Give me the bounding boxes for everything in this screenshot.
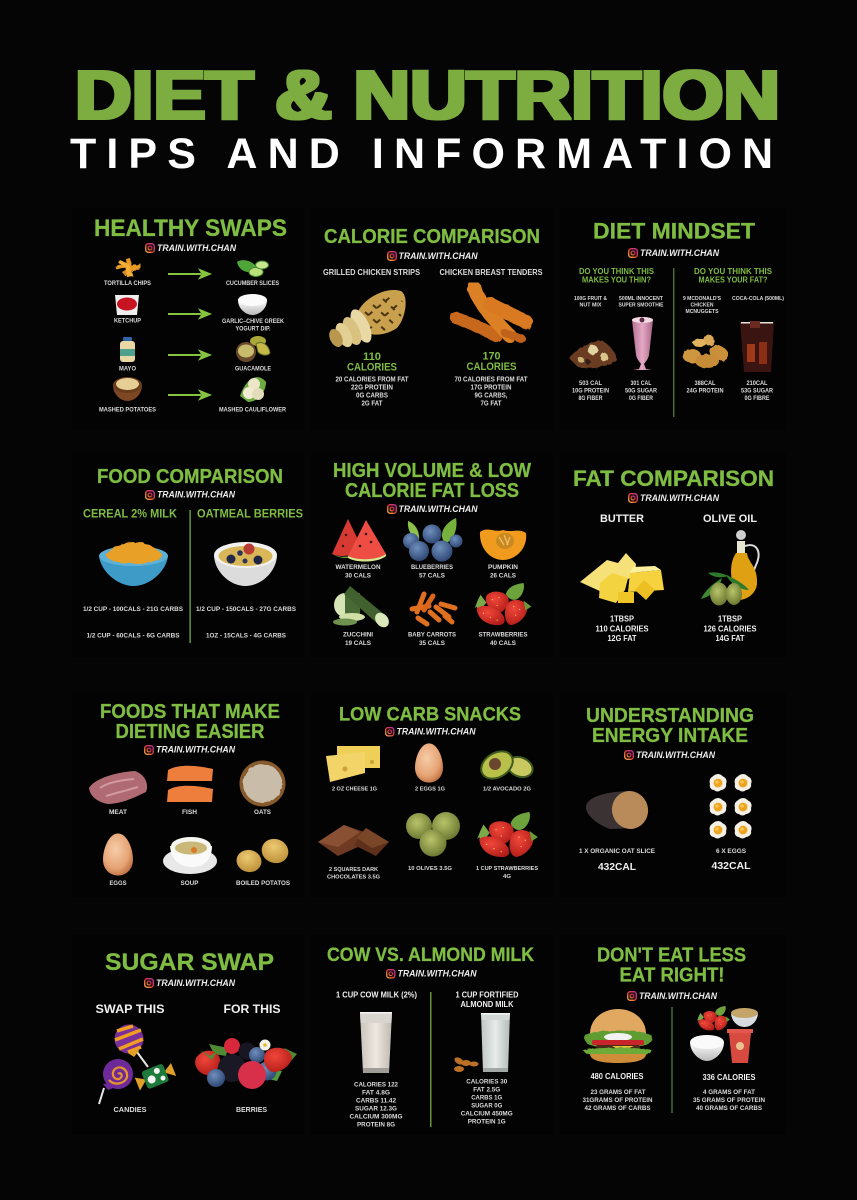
- panel: dont eat less eat right: [560, 935, 786, 1135]
- label: garlic chive greek yogurt dip: [222, 318, 284, 332]
- heading: high volume low calorie fat loss: [333, 460, 531, 502]
- stats: cereal and oatmeal: 1/2 CUP - 60CALS - 6G CARBS: [86, 633, 180, 640]
- stats: cola: 0G FIBRE: [744, 395, 770, 402]
- stats: burger: 31GRAMS OF PROTEIN: [582, 1097, 653, 1104]
- heading: food comparison: FOOD COMPARISON: [97, 466, 283, 488]
- labels: row two foods: 35 CALS: [419, 640, 446, 647]
- question: fat: DO YOU THINK THIS: [694, 267, 772, 276]
- icon: boiled potatoes: [234, 835, 292, 874]
- labels: row two foods: BABY CARROTS: [408, 632, 457, 639]
- stats: chicken tenders: 17G PROTEIN: [470, 385, 512, 392]
- stats: cereal and oatmeal: 1/2 CUP - 100CALS - 21G CARBS: [83, 606, 184, 613]
- stats: olive oil: [704, 615, 756, 643]
- stats: cow milk: CALORIES 122: [354, 1082, 398, 1089]
- stats: grilled chicken: 2G FAT: [362, 401, 383, 408]
- labels: chocolate olives strawberries: [327, 866, 538, 881]
- value: eggs calories: 432CAL: [712, 861, 750, 872]
- panel: foods that make dieting easier: [72, 692, 304, 897]
- icon: red juice cup: [727, 1029, 753, 1063]
- label: cereal: CEREAL 2% MILK: [83, 508, 178, 520]
- food labels: [574, 296, 784, 315]
- label: cow milk: 1 CUP COW MILK (2%): [336, 991, 417, 1000]
- food labels: SUPER SMOOTHIE: [618, 302, 664, 308]
- arrow: [168, 268, 212, 280]
- icon: olives: [406, 812, 460, 856]
- icon: ketchup: [115, 295, 139, 315]
- stats: smoothie: 50G SUGAR: [625, 388, 657, 395]
- question: thin: MAKES YOU THIN?: [582, 275, 651, 284]
- panel: healthy swaps: [72, 208, 304, 430]
- label: 336 calories: 336 CALORIES: [702, 1073, 756, 1082]
- stats: chicken tenders: 70 CALORIES FROM FAT: [454, 376, 528, 384]
- stats: cereal and oatmeal: 1OZ - 15CALS - 4G CARBS: [206, 633, 287, 640]
- label: 480 calories: 480 CALORIES: [590, 1072, 644, 1081]
- icon: fish: [167, 766, 213, 802]
- stats: burger: [582, 1089, 653, 1112]
- stats: chicken tenders: [454, 376, 528, 408]
- stats: cola: 53G SUGAR: [741, 388, 773, 395]
- stats: cow milk: FAT 4.8G: [362, 1090, 390, 1097]
- icon: oats: [240, 760, 286, 806]
- label: butter: BUTTER: [600, 513, 644, 525]
- labels: meat fish oats: [109, 809, 272, 816]
- stats: grilled chicken: [336, 376, 409, 408]
- labels: chocolate olives strawberries: 10 OLIVES 3.5G: [408, 866, 452, 872]
- heading: healthy swaps: HEALTHY SWAPS: [94, 215, 287, 242]
- labels: row two foods: [343, 632, 528, 647]
- heading: understanding energy intake: [586, 705, 754, 747]
- calories: 110: [347, 351, 397, 374]
- label: ketchup: KETCHUP: [114, 318, 142, 324]
- instagram handle: TRAIN.WITH.CHAN: [639, 990, 717, 1001]
- icon: avocado: [476, 746, 536, 784]
- icon: watermelon: [332, 519, 386, 562]
- icon: chicken nuggets: [683, 332, 731, 368]
- heading: foods that make dieting easier: FOODS THAT MAKE: [100, 701, 280, 723]
- icon: dark chocolate: [318, 825, 389, 856]
- icon: fruit and nut mix: [569, 340, 617, 368]
- heading: foods that make dieting easier: DIETING EASIER: [116, 721, 265, 743]
- heading: understanding energy intake: ENERGY INTAKE: [592, 725, 748, 747]
- icon: egg: [415, 743, 443, 783]
- arrow: [168, 389, 212, 401]
- stats: healthy meal: 35 GRAMS OF PROTEIN: [693, 1097, 765, 1104]
- label: oatmeal: OATMEAL BERRIES: [197, 508, 303, 520]
- labels: eggs soup potatoes: SOUP: [180, 880, 199, 887]
- value: oat slice calories: 432CAL: [598, 862, 636, 873]
- stats: butter: [596, 615, 648, 643]
- icon: oatmeal bowl: [214, 542, 277, 586]
- label: swap this: SWAP THIS: [96, 1004, 165, 1016]
- question: thin: DO YOU THINK THIS: [579, 267, 654, 276]
- icon: greek yogurt dip: [238, 294, 267, 315]
- labels: row one foods: WATERMELON: [336, 564, 381, 571]
- stats: healthy meal: [693, 1089, 765, 1112]
- food labels: NUT MIX: [580, 302, 602, 308]
- title: DIET & NUTRITION: [75, 56, 780, 134]
- heading: foods that make dieting easier: [100, 701, 280, 743]
- labels: chocolate olives strawberries: 1 CUP STRAWBERRIES: [476, 866, 538, 872]
- stats: fruit nut mix: 8G FIBER: [578, 395, 603, 402]
- label: olive oil: OLIVE OIL: [703, 513, 758, 525]
- panel: high volume low calorie: [311, 452, 553, 657]
- icon: six eggs: [710, 774, 752, 838]
- labels: cheese egg avocado: 1/2 AVOCADO 2G: [483, 787, 531, 793]
- stats: nuggets: 24G PROTEIN: [686, 388, 724, 395]
- icon: guacamole: [236, 336, 270, 362]
- label: garlic chive greek yogurt dip: YOGURT DIP.: [236, 326, 271, 332]
- labels: row one foods: 57 CALS: [419, 572, 446, 580]
- labels: chocolate olives strawberries: 4G: [503, 874, 511, 880]
- label: mashed cauliflower: MASHED CAULIFLOWER: [219, 406, 286, 414]
- icon: pumpkin: [480, 529, 526, 560]
- icon: cereal bowl: [99, 542, 168, 586]
- label: tortilla chips: TORTILLA CHIPS: [104, 280, 152, 287]
- labels: meat fish oats: MEAT: [109, 809, 127, 816]
- icon: cow milk glass: [360, 1012, 392, 1073]
- panel: low carb snacks: [311, 692, 553, 897]
- stats: cola: [741, 380, 773, 402]
- instagram handle: TRAIN.WITH.CHAN: [157, 242, 236, 253]
- calories: 170: 170: [482, 350, 501, 362]
- icon: strawberries: [475, 583, 531, 625]
- icon: strawberries: [477, 812, 538, 857]
- instagram handle: TRAIN.WITH.CHAN: [640, 247, 719, 258]
- title: [70, 56, 783, 178]
- stats: chicken tenders: 7G FAT: [480, 401, 502, 408]
- icon: grilled chicken: [327, 290, 406, 350]
- heading: sugar swap: SUGAR SWAP: [105, 949, 274, 976]
- stats: fruit nut mix: [572, 380, 609, 402]
- label: candies: CANDIES: [114, 1107, 147, 1114]
- icon: burger: [583, 1009, 652, 1063]
- icon: cauliflower: [240, 377, 266, 402]
- icon: berries: [195, 1038, 297, 1089]
- icon: zucchini: [333, 586, 392, 630]
- icon: blueberries: [403, 518, 462, 562]
- labels: row one foods: 30 CALS: [345, 572, 372, 580]
- label: almond milk: ALMOND MILK: [460, 1000, 514, 1009]
- stats: cereal and oatmeal: [83, 606, 297, 640]
- heading: dont eat less eat right: DON'T EAT LESS: [597, 945, 746, 967]
- stats: grilled chicken: 0G CARBS: [356, 393, 388, 400]
- icon: yogurt bowl: [690, 1035, 724, 1061]
- arrow: [168, 308, 212, 320]
- icon: chicken tenders: [456, 288, 526, 339]
- stats: nuggets: 388CAL: [694, 380, 716, 387]
- icon: cheese: [326, 746, 380, 782]
- labels: cheese egg avocado: 2 OZ CHEESE 1G: [332, 787, 377, 793]
- heading: dont eat less eat right: EAT RIGHT!: [620, 965, 724, 987]
- heading: fat comparison: FAT COMPARISON: [573, 466, 774, 491]
- title: TIPS AND INFORMATION: [70, 130, 783, 178]
- label: garlic chive greek yogurt dip: GARLIC–CHIVE GREEK: [222, 318, 284, 325]
- labels: eggs soup potatoes: BOILED POTATOS: [236, 880, 291, 887]
- icon: almond milk glass: [481, 1013, 510, 1072]
- labels: row two foods: ZUCCHINI: [343, 632, 373, 639]
- heading: calorie comparison: CALORIE COMPARISON: [324, 226, 540, 248]
- stats: smoothie: 301 CAL: [630, 380, 652, 387]
- labels: cheese egg avocado: 2 EGGS 1G: [415, 787, 445, 793]
- icon: cereal bowl: [731, 1008, 758, 1027]
- icon: mayo: [120, 337, 135, 362]
- labels: eggs soup potatoes: [110, 880, 291, 887]
- stats: almond milk: FAT 2.5G: [473, 1086, 500, 1093]
- stats: smoothie: 0G FIBER: [629, 395, 653, 402]
- label: almond milk: [456, 991, 519, 1009]
- stats: smoothie: [625, 380, 657, 402]
- stats: burger: 23 GRAMS OF FAT: [590, 1089, 646, 1096]
- icon: baby carrots: [412, 594, 455, 624]
- labels: eggs soup potatoes: EGGS: [110, 880, 127, 887]
- icon: smoothie: [632, 317, 653, 370]
- labels: cheese egg avocado: [332, 787, 531, 793]
- stats: cola: 210CAL: [746, 380, 768, 387]
- stats: butter: 12G FAT: [608, 634, 637, 643]
- label: mashed potatoes: MASHED POTATOES: [99, 406, 157, 414]
- heading: high volume low calorie fat loss: HIGH VOLUME & LOW: [333, 460, 531, 482]
- stats: grilled chicken: 22G PROTEIN: [351, 385, 393, 392]
- label: cucumber slices: CUCUMBER SLICES: [226, 280, 280, 287]
- panel: calorie comparison: [311, 208, 553, 430]
- icon: egg: [103, 834, 133, 876]
- icon: strawberries: [697, 1006, 730, 1030]
- labels: row two foods: 40 CALS: [490, 640, 517, 647]
- stats: cow milk: [350, 1082, 403, 1129]
- stats: cereal and oatmeal: 1/2 CUP - 150CALS - 27G CARBS: [196, 606, 297, 613]
- stats: almond milk: [461, 1078, 513, 1125]
- stats: cow milk: CALCIUM 300MG: [350, 1114, 403, 1121]
- food labels: COCA-COLA (500ML): [732, 296, 784, 302]
- stats: olive oil: 126 CALORIES: [704, 624, 756, 634]
- instagram handle: TRAIN.WITH.CHAN: [156, 977, 235, 988]
- panel: diet mindset: [560, 208, 786, 430]
- label: oat slice: 1 X ORGANIC OAT SLICE: [579, 848, 656, 855]
- stats: healthy meal: 40 GRAMS OF CARBS: [696, 1105, 763, 1112]
- instagram handle: TRAIN.WITH.CHAN: [156, 744, 235, 754]
- stats: almond milk: CARBS 1G: [471, 1094, 502, 1101]
- question: fat: [694, 267, 772, 284]
- stats: almond milk: PROTEIN 1G: [468, 1118, 506, 1125]
- icon: mashed potatoes: [113, 377, 142, 401]
- calories: 110: CALORIES: [347, 362, 397, 374]
- labels: row one foods: 26 CALS: [490, 572, 517, 580]
- icon: cola glass: [740, 321, 774, 372]
- icon: almonds: [453, 1056, 478, 1072]
- icon: candies: [99, 1024, 177, 1104]
- stats: grilled chicken: 20 CALORIES FROM FAT: [336, 376, 409, 384]
- heading: high volume low calorie fat loss: CALORIE FAT LOSS: [345, 480, 519, 502]
- instagram handle: TRAIN.WITH.CHAN: [398, 250, 478, 261]
- calories: 170: [466, 350, 516, 373]
- stats: olive oil: 14G FAT: [716, 634, 745, 643]
- stats: chicken tenders: 9G CARBS,: [474, 393, 508, 400]
- labels: row two foods: 19 CALS: [345, 640, 372, 647]
- heading: understanding energy intake: UNDERSTANDING: [586, 705, 754, 727]
- question: fat: MAKES YOUR FAT?: [698, 275, 768, 284]
- panel: food comparison: [72, 452, 304, 657]
- instagram handle: TRAIN.WITH.CHAN: [396, 726, 476, 736]
- stats: almond milk: CALCIUM 450MG: [461, 1110, 513, 1117]
- heading: cow vs almond milk: COW VS. ALMOND MILK: [327, 944, 534, 966]
- stats: burger: 42 GRAMS OF CARBS: [584, 1105, 651, 1112]
- calories: 110: 110: [363, 351, 381, 363]
- panel: cow vs almond milk: [311, 935, 553, 1135]
- label: berries: BERRIES: [236, 1107, 267, 1114]
- label: grilled chicken strips: GRILLED CHICKEN STRIPS: [323, 268, 420, 277]
- panel: understanding energy intake: [560, 692, 786, 897]
- instagram handle: TRAIN.WITH.CHAN: [157, 488, 235, 500]
- labels: chocolate olives strawberries: 2 SQUARES DARK: [329, 867, 378, 873]
- icon: oat bread slice: [586, 787, 652, 833]
- icon: soup: [163, 837, 217, 874]
- stats: butter: 1TBSP: [610, 615, 634, 624]
- stats: fruit nut mix: 10G PROTEIN: [572, 388, 609, 395]
- icon: meat: [89, 771, 147, 804]
- question: thin: [579, 267, 654, 284]
- label: chicken breast tenders: CHICKEN BREAST TENDERS: [440, 268, 542, 277]
- heading: diet mindset: DIET MINDSET: [593, 218, 755, 244]
- heading: dont eat less eat right: [597, 945, 746, 987]
- label: for this: FOR THIS: [224, 1004, 281, 1016]
- food labels: 9 MCDONALD'S: [683, 296, 721, 302]
- stats: cow milk: SUGAR 12.3G: [355, 1106, 397, 1113]
- instagram handle: TRAIN.WITH.CHAN: [640, 492, 719, 503]
- stats: cow milk: PROTEIN 8G: [357, 1122, 395, 1129]
- stats: almond milk: SUGAR 0G: [471, 1102, 502, 1109]
- stats: butter: 110 CALORIES: [596, 624, 648, 634]
- arrow: [168, 349, 212, 361]
- icon: olive oil: [701, 530, 759, 606]
- stats: cow milk: CARBS 11.42: [356, 1098, 396, 1105]
- heading: low carb snacks: LOW CARB SNACKS: [339, 704, 521, 726]
- instagram handle: TRAIN.WITH.CHAN: [398, 503, 478, 514]
- labels: row two foods: STRAWBERRIES: [478, 632, 528, 639]
- labels: chocolate olives strawberries: CHOCOLATES 3.5G: [327, 875, 380, 881]
- food labels: MCNUGGETS: [686, 309, 719, 315]
- label: guacamole: GUACAMOLE: [235, 366, 272, 372]
- panel: fat comparison: [560, 452, 786, 657]
- labels: row one foods: BLUEBERRIES: [411, 564, 454, 571]
- stats: nuggets: [686, 380, 724, 395]
- icon: butter: [580, 553, 664, 603]
- food labels: 500ML INNOCENT: [619, 296, 664, 302]
- instagram handle: TRAIN.WITH.CHAN: [398, 968, 477, 978]
- instagram handle: TRAIN.WITH.CHAN: [636, 749, 715, 760]
- labels: meat fish oats: OATS: [254, 809, 272, 816]
- food labels: CHICKEN: [690, 302, 714, 308]
- labels: row one foods: PUMPKIN: [488, 564, 518, 571]
- stats: almond milk: CALORIES 30: [466, 1078, 508, 1085]
- food labels: 100G FRUIT &: [574, 296, 607, 302]
- labels: row one foods: [336, 564, 518, 580]
- icon: tortilla chips: [115, 258, 141, 277]
- stats: healthy meal: 4 GRAMS OF FAT: [703, 1089, 755, 1096]
- label: eggs: 6 X EGGS: [716, 848, 747, 855]
- label: almond milk: 1 CUP FORTIFIED: [456, 991, 519, 1000]
- stats: olive oil: 1TBSP: [718, 615, 742, 624]
- labels: meat fish oats: FISH: [182, 809, 197, 816]
- label: mayo: MAYO: [119, 366, 136, 372]
- icon: cucumber slices: [237, 260, 268, 276]
- panel: sugar swap: [72, 935, 304, 1135]
- calories: 170: CALORIES: [466, 361, 516, 373]
- stats: fruit nut mix: 503 CAL: [579, 380, 602, 387]
